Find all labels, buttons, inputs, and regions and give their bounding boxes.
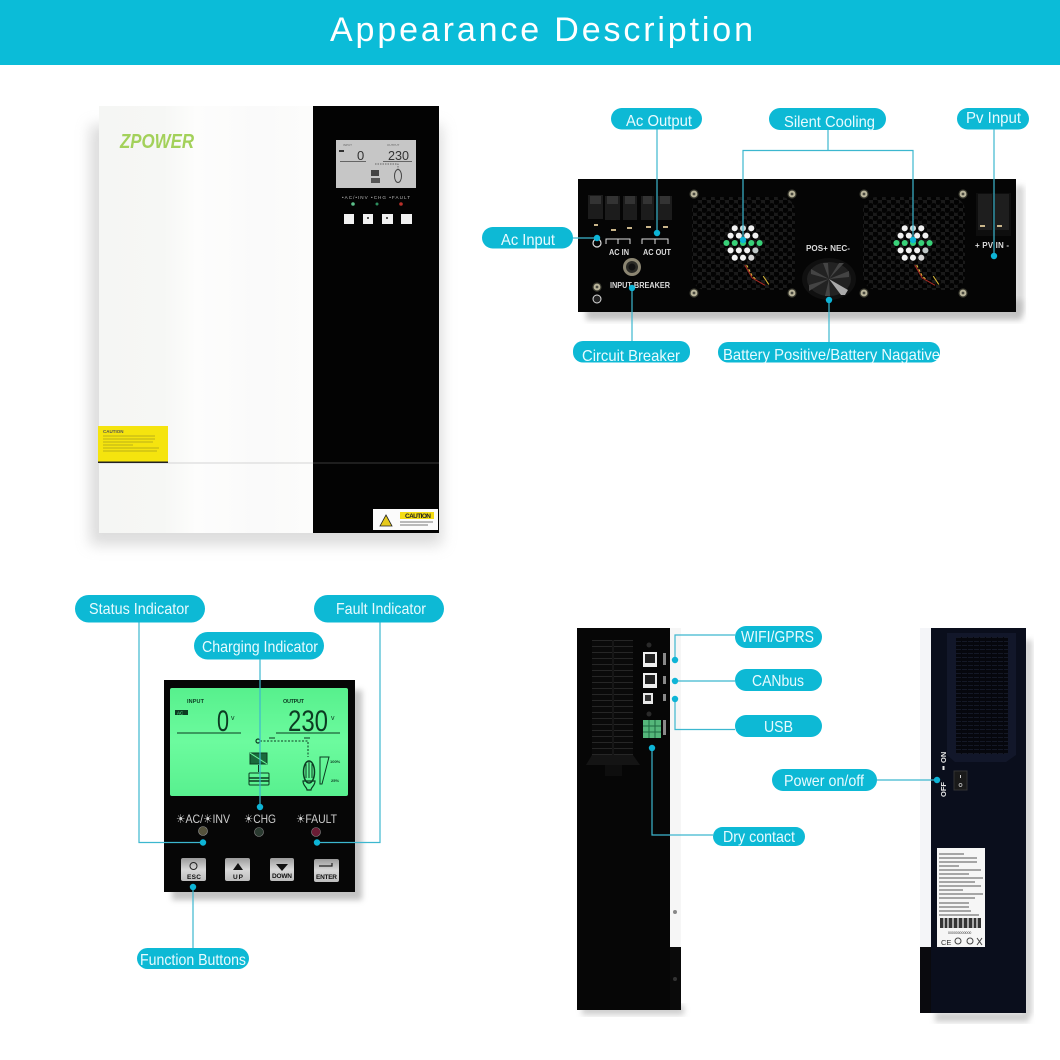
- callout: Battery Positive/Battery Nagative: [718, 297, 940, 364]
- POS NEG label: POS+ NEC-: [806, 244, 850, 253]
- front LCD screen: 230: [388, 148, 409, 163]
- PV terminal: [976, 193, 1011, 236]
- LEDs: [198, 826, 320, 836]
- side view left: [577, 628, 684, 1015]
- RJ45 and USB ports: [643, 642, 666, 735]
- status labels: ☀AC/☀INV: [176, 812, 230, 826]
- callout: Ac Output: [611, 108, 702, 236]
- green LCD display: v: [231, 715, 235, 722]
- callout: Circuit Breaker: Circuit Breaker: [582, 348, 681, 365]
- AC IN label: AC IN: [609, 248, 629, 257]
- fan left: [689, 189, 797, 298]
- green LCD display: 0: [217, 705, 229, 738]
- function buttons: DOWN: [272, 873, 292, 880]
- function buttons: UP: [233, 874, 244, 881]
- callout: Pv Input: Pv Input: [966, 110, 1022, 127]
- callout: Charging Indicator: Charging Indicator: [202, 639, 319, 656]
- side vent: [586, 640, 640, 776]
- green LCD display: v: [331, 715, 335, 722]
- fan right: [859, 189, 968, 298]
- callout: Circuit Breaker: [573, 285, 690, 365]
- power switch: [954, 771, 967, 790]
- callout: Charging Indicator: [194, 632, 324, 810]
- function buttons: ENTER: [316, 874, 337, 881]
- control panel: ☀FAULT: [296, 812, 338, 826]
- callout: Fault Indicator: [314, 595, 444, 846]
- side view right: [920, 628, 1032, 1022]
- front view of inverter: [90, 106, 442, 545]
- front LCD screen: [336, 140, 416, 188]
- control panel: ☀CHG: [244, 812, 276, 826]
- callout: USB: USB: [764, 719, 793, 736]
- callout: Power on/off: [772, 769, 940, 791]
- ground screw: [592, 282, 602, 303]
- green LCD display: [170, 688, 348, 796]
- green LCD display: 100%: [330, 759, 341, 764]
- callout: Power on/off: Power on/off: [784, 773, 864, 790]
- green LCD display: AC: [177, 710, 184, 716]
- callout: Pv Input: [957, 108, 1029, 259]
- caution sticker white: CAUTION: [405, 513, 431, 520]
- callout: Ac Output: Ac Output: [626, 113, 693, 130]
- callout: Dry contact: [649, 745, 805, 846]
- caution sticker white: [373, 509, 438, 530]
- ON label: ON: [939, 752, 948, 763]
- battery connector: [802, 258, 856, 300]
- front buttons: [344, 214, 412, 224]
- green LCD display: INPUT: [187, 699, 205, 705]
- callout: WIFI/GPRS: [672, 626, 822, 663]
- logo: ZPOWER: ZPOWER: [119, 131, 194, 153]
- front LEDs: [351, 202, 403, 206]
- front LCD screen: INPUT: [343, 143, 352, 147]
- front LCD screen: OUTPUT: [387, 143, 400, 147]
- INPUT BREAKER label: INPUT BREAKER: [610, 281, 670, 290]
- spec label: [937, 848, 985, 947]
- green LCD display: 25%: [331, 778, 339, 783]
- control panel: [164, 680, 362, 900]
- function buttons: ESC: [187, 874, 201, 881]
- front LCD screen: 0: [357, 148, 364, 163]
- AC terminal blocks: [588, 195, 672, 247]
- callout: Silent Cooling: [740, 108, 916, 243]
- AC OUT label: AC OUT: [643, 248, 671, 257]
- callout: Function Buttons: [137, 884, 249, 969]
- caution sticker yellow: CAUTION: [103, 429, 124, 434]
- callout: Dry contact: Dry contact: [723, 829, 795, 846]
- callout: Silent Cooling: Silent Cooling: [784, 114, 875, 131]
- input breaker knob: [623, 258, 641, 276]
- spec label: CE: [941, 938, 951, 947]
- header banner: [0, 0, 1060, 65]
- spec label: 000000000000: [948, 931, 971, 935]
- OFF label: OFF: [939, 782, 948, 797]
- callout: Status Indicator: [75, 595, 206, 846]
- PV IN label: + PV IN -: [975, 241, 1009, 250]
- callout: WIFI/GPRS: WIFI/GPRS: [741, 629, 814, 646]
- callout: Fault Indicator: Fault Indicator: [336, 601, 427, 618]
- callout: Ac Input: [482, 227, 600, 249]
- function buttons: [181, 858, 339, 882]
- callout: Status Indicator: Status Indicator: [89, 601, 190, 618]
- title: Appearance Description: [330, 11, 753, 49]
- green LCD display: OUTPUT: [283, 699, 305, 705]
- callout: USB: [672, 696, 822, 737]
- rear panel of inverter: [578, 179, 1024, 320]
- green dry contact connector: [643, 720, 661, 738]
- callout: CANbus: [672, 669, 822, 691]
- right vent: [947, 633, 1016, 762]
- callout: Battery Positive/Battery Nagative: Battery Positive/Battery Nagative: [723, 347, 940, 364]
- callout: Ac Input: Ac Input: [501, 232, 556, 249]
- green LCD display: 230: [288, 705, 328, 738]
- callout: CANbus: CANbus: [752, 673, 804, 690]
- callout: Function Buttons: Function Buttons: [140, 952, 246, 969]
- caution sticker yellow: [98, 426, 168, 463]
- front indicator labels: •AC/•INV •CHG •FAULT: [342, 195, 410, 200]
